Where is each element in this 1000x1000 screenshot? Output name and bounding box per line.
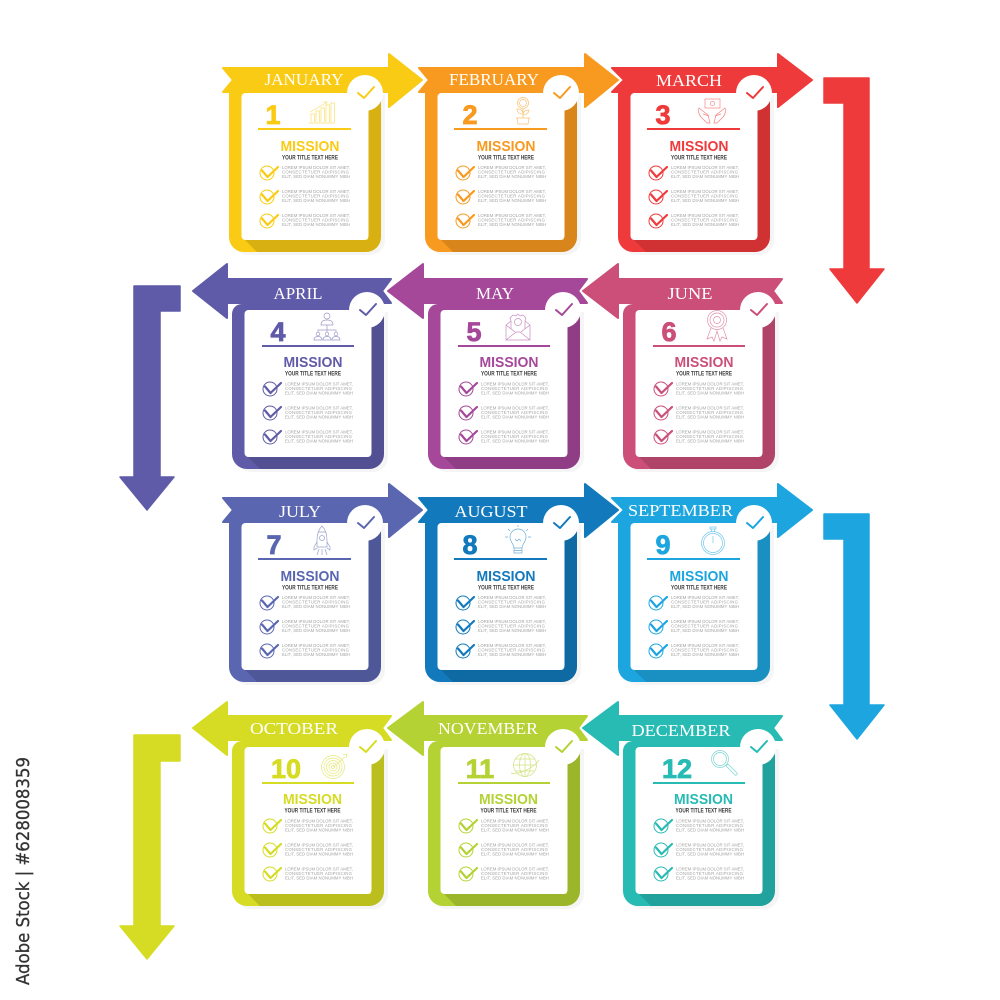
list item [260,595,350,610]
list item: LOREM IPSUM DOLOR SIT AMET, [282,189,350,194]
list item: LOREM IPSUM DOLOR SIT AMET, [676,429,744,434]
icon: team hierarchy [314,313,340,340]
list item: ELIT, SED DIAM NONUMMY NIBH [285,391,353,396]
list item [459,429,549,444]
heading: MISSION [480,354,538,371]
list item: LOREM IPSUM DOLOR SIT AMET, [671,619,739,624]
banner arrow: December [583,702,782,755]
card: October: YOUR TITLE TEXT HERE [284,808,340,814]
list item [260,643,350,658]
list item: ELIT, SED DIAM NONUMMY NIBH [676,876,744,881]
list item: LOREM IPSUM DOLOR SIT AMET, [478,643,546,648]
list item: ELIT, SED DIAM NONUMMY NIBH [671,222,739,227]
list item: LOREM IPSUM DOLOR SIT AMET, [481,405,549,410]
card: June: YOUR TITLE TEXT HERE [676,371,732,377]
list item: CONSECTETUER ADIPISCING [282,194,350,198]
list item: ELIT, SED DIAM NONUMMY NIBH [676,852,744,857]
list item: ELIT, SED DIAM NONUMMY NIBH [671,604,739,609]
list item: LOREM IPSUM DOLOR SIT AMET, [285,818,353,823]
list item [456,165,546,180]
list item: CONSECTETUER ADIPISCING [285,823,353,828]
heading: MISSION [674,791,733,808]
list item: LOREM IPSUM DOLOR SIT AMET, [282,213,350,218]
card: March: YOUR TITLE TEXT HERE [671,155,727,161]
icon: money plant [516,98,530,124]
card: January [223,54,422,255]
icon: envelope with gear [506,314,530,340]
list item [649,595,739,610]
list item: ELIT, SED DIAM NONUMMY NIBH [671,652,739,657]
list item: ELIT, SED DIAM NONUMMY NIBH [676,391,744,396]
list item [456,189,546,204]
card: February [419,54,618,255]
list item: CONSECTETUER ADIPISCING [282,170,350,174]
heading: MISSION [670,568,728,585]
list item [260,213,350,228]
list item: ELIT, SED DIAM NONUMMY NIBH [671,628,739,633]
list item: CONSECTETUER ADIPISCING [282,624,350,628]
list item: ELIT, SED DIAM NONUMMY NIBH [478,222,546,227]
list item: ELIT, SED DIAM NONUMMY NIBH [285,876,353,881]
list item: CONSECTETUER ADIPISCING [285,847,353,852]
icon: target and arrow [322,754,347,778]
banner arrow: April [193,264,391,318]
list item [649,189,739,204]
list item: LOREM IPSUM DOLOR SIT AMET, [285,381,353,386]
month label: AUGUST [454,502,528,521]
banner arrow: January [223,54,422,107]
stock attribution label: Adobe Stock | #628008359 [13,757,34,985]
step number: 9 [655,530,671,560]
list item: LOREM IPSUM DOLOR SIT AMET, [285,429,353,434]
heading: MISSION [284,354,342,371]
list item: CONSECTETUER ADIPISCING [671,648,739,652]
icon: stopwatch [702,527,724,554]
list item: ELIT, SED DIAM NONUMMY NIBH [481,828,549,833]
list item: ELIT, SED DIAM NONUMMY NIBH [285,852,353,857]
heading: MISSION [479,791,538,808]
month label: NOVEMBER [438,719,539,738]
card: April [193,264,391,472]
list item: LOREM IPSUM DOLOR SIT AMET, [285,866,353,871]
list item: ELIT, SED DIAM NONUMMY NIBH [282,198,350,203]
list item: LOREM IPSUM DOLOR SIT AMET, [671,595,739,600]
list item: CONSECTETUER ADIPISCING [478,170,546,174]
list item: CONSECTETUER ADIPISCING [676,871,744,876]
list item: ELIT, SED DIAM NONUMMY NIBH [676,439,744,444]
banner arrow: May [388,264,587,318]
card: October [193,702,391,909]
list item: CONSECTETUER ADIPISCING [481,823,549,828]
icon: rocket [314,526,330,555]
icon: globe [511,754,539,776]
list item: CONSECTETUER ADIPISCING [671,194,739,198]
list item: CONSECTETUER ADIPISCING [481,871,549,876]
list item: LOREM IPSUM DOLOR SIT AMET, [478,595,546,600]
list item: CONSECTETUER ADIPISCING [676,410,744,415]
list item: ELIT, SED DIAM NONUMMY NIBH [478,198,546,203]
month label: OCTOBER [250,719,339,738]
list item: LOREM IPSUM DOLOR SIT AMET, [481,866,549,871]
list item: CONSECTETUER ADIPISCING [671,600,739,604]
list item: LOREM IPSUM DOLOR SIT AMET, [671,643,739,648]
list item: LOREM IPSUM DOLOR SIT AMET, [481,818,549,823]
list item: CONSECTETUER ADIPISCING [285,871,353,876]
list item: CONSECTETUER ADIPISCING [478,624,546,628]
card: June [583,264,782,472]
list item [654,842,744,857]
list item: CONSECTETUER ADIPISCING [285,410,353,415]
step number: 4 [270,317,286,347]
list item: ELIT, SED DIAM NONUMMY NIBH [282,628,350,633]
banner arrow: November [388,702,587,755]
card: December [583,702,782,909]
card: April: YOUR TITLE TEXT HERE [285,371,341,377]
list item [459,818,549,833]
list item: CONSECTETUER ADIPISCING [478,218,546,222]
list item: ELIT, SED DIAM NONUMMY NIBH [481,439,549,444]
month label: APRIL [274,284,322,303]
list item: ELIT, SED DIAM NONUMMY NIBH [481,876,549,881]
list item: ELIT, SED DIAM NONUMMY NIBH [478,652,546,657]
heading: MISSION [283,791,342,808]
list item [260,189,350,204]
step number: 11 [466,754,494,784]
list item [459,405,549,420]
list item [456,643,546,658]
month label: FEBRUARY [449,70,539,89]
list item: CONSECTETUER ADIPISCING [282,600,350,604]
month label: JUNE [668,284,712,303]
list item: CONSECTETUER ADIPISCING [478,648,546,652]
list item: ELIT, SED DIAM NONUMMY NIBH [478,604,546,609]
list item: ELIT, SED DIAM NONUMMY NIBH [282,652,350,657]
card: January: YOUR TITLE TEXT HERE [282,155,338,161]
month label: MAY [476,284,514,303]
step number: 2 [462,100,478,130]
list item: ELIT, SED DIAM NONUMMY NIBH [481,391,549,396]
card: September [612,484,812,685]
arrow: red down connector [824,78,884,303]
list item [459,842,549,857]
list item [654,381,744,396]
heading: MISSION [280,568,340,585]
card: August [419,484,618,685]
list item: LOREM IPSUM DOLOR SIT AMET, [478,213,546,218]
step number: 8 [462,530,478,560]
list item [654,429,744,444]
list item: CONSECTETUER ADIPISCING [481,434,549,439]
list item: LOREM IPSUM DOLOR SIT AMET, [285,842,353,847]
icon: magnifying glass [712,750,737,775]
banner arrow: September [612,484,812,537]
arrow: blue down connector [824,514,884,739]
card: July [223,484,422,685]
list item: CONSECTETUER ADIPISCING [282,648,350,652]
icon: hands holding money [699,99,725,123]
list item: ELIT, SED DIAM NONUMMY NIBH [478,174,546,179]
list item [459,866,549,881]
list item [263,842,353,857]
card: March [612,54,812,255]
list item: ELIT, SED DIAM NONUMMY NIBH [676,415,744,420]
card: September: YOUR TITLE TEXT HERE [671,585,727,591]
banner arrow: October [193,702,391,755]
list item [456,619,546,634]
month label: JULY [279,502,321,521]
heading: MISSION [674,354,734,371]
list item: ELIT, SED DIAM NONUMMY NIBH [481,415,549,420]
list item: ELIT, SED DIAM NONUMMY NIBH [671,198,739,203]
icon: light bulb [505,525,531,553]
list item: LOREM IPSUM DOLOR SIT AMET, [282,643,350,648]
card: November: YOUR TITLE TEXT HERE [480,808,536,814]
icon: growth chart [309,102,335,123]
list item: LOREM IPSUM DOLOR SIT AMET, [481,381,549,386]
list item [263,381,353,396]
list item [654,405,744,420]
list item [456,213,546,228]
list item: ELIT, SED DIAM NONUMMY NIBH [285,439,353,444]
list item: ELIT, SED DIAM NONUMMY NIBH [282,604,350,609]
list item: LOREM IPSUM DOLOR SIT AMET, [671,189,739,194]
list item: CONSECTETUER ADIPISCING [285,386,353,391]
list item: LOREM IPSUM DOLOR SIT AMET, [676,405,744,410]
month label: JANUARY [264,70,344,89]
list item: LOREM IPSUM DOLOR SIT AMET, [282,595,350,600]
list item: CONSECTETUER ADIPISCING [676,823,744,828]
list item: LOREM IPSUM DOLOR SIT AMET, [478,619,546,624]
step number: 6 [661,317,677,347]
heading: MISSION [280,138,340,155]
list item [260,619,350,634]
step number: 3 [655,100,671,130]
list item: CONSECTETUER ADIPISCING [481,847,549,852]
list item: LOREM IPSUM DOLOR SIT AMET, [676,818,744,823]
list item [649,619,739,634]
step number: 12 [662,754,692,784]
list item [260,165,350,180]
list item: CONSECTETUER ADIPISCING [481,386,549,391]
list item: CONSECTETUER ADIPISCING [671,218,739,222]
list item [263,429,353,444]
list item: LOREM IPSUM DOLOR SIT AMET, [676,842,744,847]
list item: ELIT, SED DIAM NONUMMY NIBH [282,222,350,227]
list item [649,165,739,180]
heading: MISSION [476,138,536,155]
card: November [388,702,587,909]
card: December: YOUR TITLE TEXT HERE [676,808,732,814]
list item [654,818,744,833]
banner arrow: February [419,54,618,107]
list item [649,643,739,658]
arrow: lime down connector [120,735,180,959]
list item: ELIT, SED DIAM NONUMMY NIBH [676,828,744,833]
list item: ELIT, SED DIAM NONUMMY NIBH [285,828,353,833]
icon: award rosette [707,310,727,341]
list item: ELIT, SED DIAM NONUMMY NIBH [285,415,353,420]
step number: 1 [265,100,281,130]
banner arrow: March [612,54,812,107]
banner arrow: July [223,484,422,537]
list item: CONSECTETUER ADIPISCING [671,624,739,628]
month label: SEPTEMBER [628,501,734,520]
list item [456,595,546,610]
card: February: YOUR TITLE TEXT HERE [478,155,534,161]
list item: LOREM IPSUM DOLOR SIT AMET, [676,381,744,386]
list item: LOREM IPSUM DOLOR SIT AMET, [285,405,353,410]
list item: LOREM IPSUM DOLOR SIT AMET, [478,165,546,170]
list item: ELIT, SED DIAM NONUMMY NIBH [478,628,546,633]
list item: CONSECTETUER ADIPISCING [481,410,549,415]
list item: LOREM IPSUM DOLOR SIT AMET, [671,213,739,218]
step number: 5 [466,317,482,347]
list item: LOREM IPSUM DOLOR SIT AMET, [481,842,549,847]
list item [263,818,353,833]
heading: MISSION [476,568,536,585]
list item: LOREM IPSUM DOLOR SIT AMET, [282,165,350,170]
list item: ELIT, SED DIAM NONUMMY NIBH [481,852,549,857]
list item: LOREM IPSUM DOLOR SIT AMET, [282,619,350,624]
list item: CONSECTETUER ADIPISCING [671,170,739,174]
list item [263,866,353,881]
list item [459,381,549,396]
list item: CONSECTETUER ADIPISCING [285,434,353,439]
step number: 10 [271,754,301,784]
list item [654,866,744,881]
list item: LOREM IPSUM DOLOR SIT AMET, [481,429,549,434]
list item: LOREM IPSUM DOLOR SIT AMET, [671,165,739,170]
card: May: YOUR TITLE TEXT HERE [481,371,537,377]
list item [263,405,353,420]
list item: LOREM IPSUM DOLOR SIT AMET, [478,189,546,194]
step number: 7 [266,530,282,560]
card: August: YOUR TITLE TEXT HERE [478,585,534,591]
list item: ELIT, SED DIAM NONUMMY NIBH [282,174,350,179]
banner arrow: August [419,484,618,537]
list item: CONSECTETUER ADIPISCING [676,434,744,439]
month label: DECEMBER [632,721,731,740]
list item [649,213,739,228]
heading: MISSION [670,138,728,155]
month label: MARCH [656,71,722,90]
list item: ELIT, SED DIAM NONUMMY NIBH [671,174,739,179]
list item: CONSECTETUER ADIPISCING [478,600,546,604]
list item: CONSECTETUER ADIPISCING [478,194,546,198]
arrow: purple down connector [120,286,180,510]
list item: CONSECTETUER ADIPISCING [676,386,744,391]
card: July: YOUR TITLE TEXT HERE [282,585,338,591]
card: May [388,264,587,472]
list item: CONSECTETUER ADIPISCING [676,847,744,852]
banner arrow: June [583,264,782,318]
list item: LOREM IPSUM DOLOR SIT AMET, [676,866,744,871]
list item: CONSECTETUER ADIPISCING [282,218,350,222]
